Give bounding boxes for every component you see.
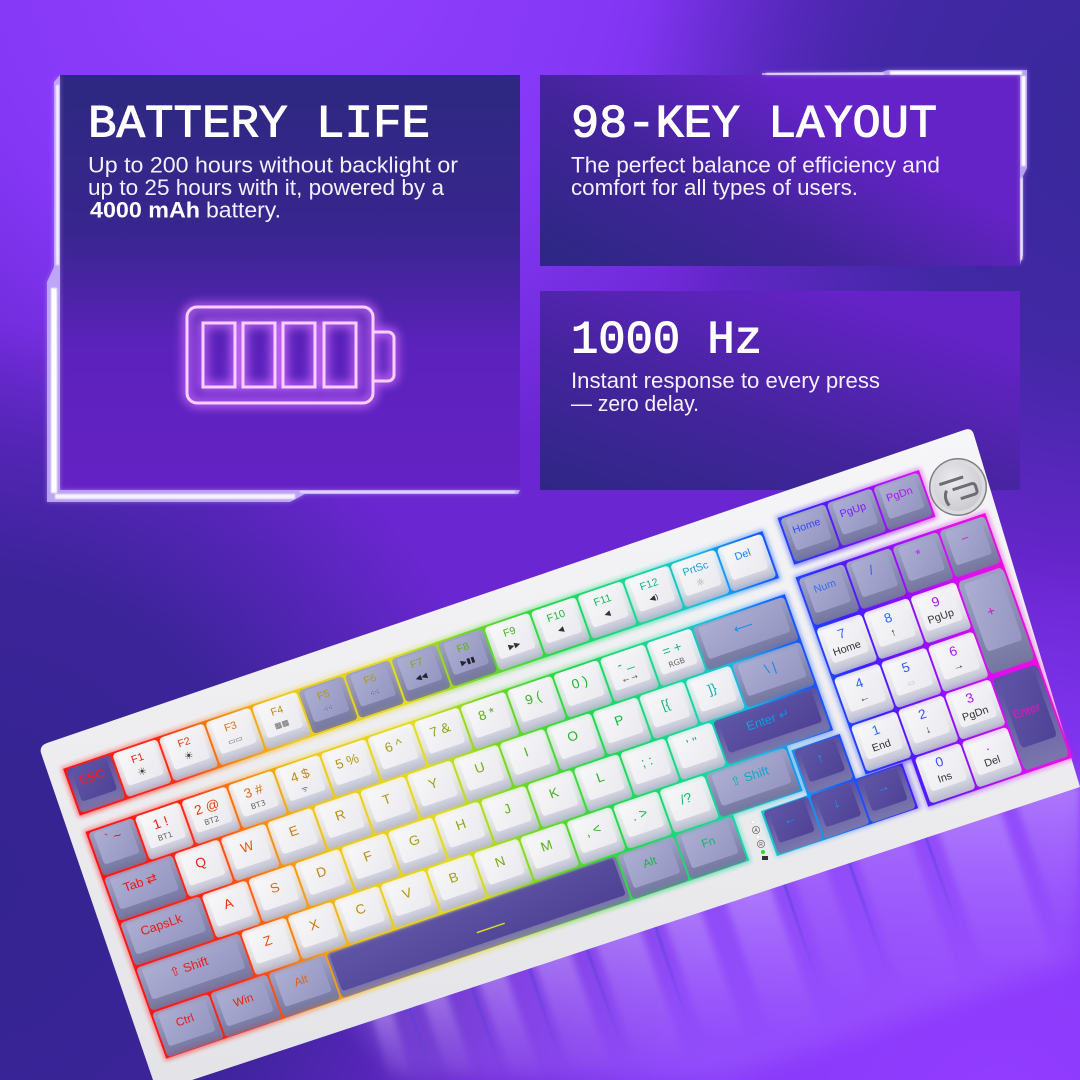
glass frame: layout panel (762, 70, 1027, 265)
text: response description: Instant response to every press (571, 368, 880, 393)
text: layout description: comfort for all types of users. (571, 175, 858, 200)
numpad: + (985, 603, 997, 619)
number key row: 4 $ (288, 765, 312, 785)
panel: 1000 Hz (540, 291, 1020, 490)
number key row: 2 @ (192, 796, 221, 818)
function key row: F8 (455, 640, 471, 656)
shift key row: C (353, 901, 368, 918)
caps key row: S (268, 879, 282, 896)
tab key row: O (565, 728, 580, 745)
tab key row: [{ (659, 696, 673, 713)
status indicators: R (759, 842, 763, 848)
number key row: 7 & (428, 720, 452, 740)
number key row: RGB (667, 656, 686, 670)
shift key row: N (493, 853, 507, 870)
caps key row: J (502, 801, 513, 817)
numpad: * (914, 546, 924, 562)
tab key row: Q (193, 854, 208, 871)
numpad: Ins (936, 770, 954, 786)
caps key row: ; : (639, 753, 655, 770)
function key row (66, 534, 777, 813)
arrow keys: → (874, 778, 892, 796)
caps key row: F (361, 848, 374, 865)
function key row: ☼ (695, 576, 707, 589)
function key row: PrtSc (681, 559, 711, 579)
tab key row: Y (426, 775, 440, 792)
number key row: - _ (615, 653, 635, 673)
shift key row: Z (261, 932, 274, 949)
heading: battery life: BATTERY LIFE (88, 98, 430, 150)
status indicators: A (754, 828, 758, 834)
number key row: = + (660, 639, 684, 659)
number key row: ← → (621, 672, 640, 685)
bottom key row: Alt (641, 854, 659, 871)
function key row: ▦▦ (273, 718, 290, 731)
function key row: ▭▭ (227, 733, 244, 747)
function key row: F10 (545, 608, 567, 625)
status indicators (751, 820, 768, 860)
numpad (798, 516, 1070, 820)
numpad: 3 (964, 690, 976, 706)
lighting backing: key gaps (61, 454, 1072, 1065)
bottom key row: Win (232, 991, 255, 1010)
function key row: F11 (592, 592, 613, 609)
arrow keys: ↓ (830, 795, 842, 811)
tab key row: R (333, 807, 348, 824)
caps key row: L (594, 769, 607, 785)
text: battery description: battery. (206, 198, 281, 222)
number key row (88, 597, 799, 876)
numpad: 5 (900, 659, 912, 676)
lighting bleed over keys (72, 485, 1069, 1057)
numpad: PgUp (926, 607, 956, 627)
function key row: ☀ (182, 748, 195, 763)
text: battery description (88, 152, 458, 222)
number key row: ` ~ (103, 827, 124, 846)
glass frame: battery panel (47, 75, 520, 502)
numpad: 7 (836, 626, 848, 642)
number key row: ⟵ (732, 616, 756, 637)
heading: 98-key layout: 98-KEY LAYOUT (571, 98, 937, 150)
function key row: F7 (409, 656, 425, 671)
function key row: ◀◀ (414, 671, 429, 683)
bottom key row: Alt (292, 972, 310, 989)
numpad: 2 (916, 706, 929, 722)
function key row: F1 (130, 751, 146, 766)
numpad: . (983, 738, 991, 753)
function key row: ☀ (136, 764, 149, 779)
arrow keys (747, 720, 916, 855)
keyboard plate (41, 429, 1080, 1080)
tab key row: P (612, 712, 626, 729)
arrow keys: ← (781, 810, 799, 828)
panel: battery life (47, 75, 520, 502)
knob (929, 458, 987, 516)
tab key row: W (239, 838, 256, 856)
navigation keys (780, 472, 933, 562)
numpad: Home (831, 638, 863, 659)
text: response description (571, 368, 880, 416)
numpad: ↓ (923, 724, 933, 736)
text: battery description: Up to 200 hours without backlight or (88, 152, 458, 178)
numpad: / (867, 563, 876, 578)
number key row: 8 * (476, 704, 498, 724)
navigation keys: PgUp (838, 500, 868, 520)
shift key row (136, 747, 801, 1011)
tab key row: ]} (706, 680, 719, 697)
caps key row: G (407, 832, 422, 849)
text: layout description: The perfect balance of efficiency and (571, 152, 940, 178)
spacebar (326, 856, 631, 998)
function key row: F4 (269, 704, 285, 719)
number key row: BT2 (203, 814, 221, 827)
function key row: ESC (77, 766, 107, 788)
tab key row: I (522, 744, 530, 760)
function key row: F6 (362, 672, 378, 687)
numpad: Num (812, 577, 838, 596)
motion streaks under keyboard (340, 770, 1080, 1080)
number key row: 1 ! (151, 813, 170, 832)
numpad: − (959, 530, 971, 547)
heading: 1000 Hz: 1000 Hz (571, 314, 762, 366)
bottom key row: Fn (700, 834, 717, 851)
caps key row: K (547, 785, 561, 802)
function key row: F3 (223, 719, 239, 735)
text: layout description (571, 152, 940, 200)
tab key row: U (473, 759, 487, 776)
function key row: ⁖⁖ (369, 687, 381, 698)
lighting glow on plate (58, 452, 1075, 1067)
shift key row: ⇧ Shift (728, 763, 771, 789)
shift key row: . > (630, 805, 650, 824)
number key row: BT1 (157, 830, 174, 843)
icon: neon battery (187, 307, 394, 403)
number key row: 0 ) (570, 673, 590, 692)
function key row: ⁖⁖ (322, 703, 334, 714)
numpad: 8 (882, 610, 894, 626)
function key row: Del (733, 547, 752, 563)
function key row: ◀) (648, 592, 660, 603)
numpad: ▭ (906, 677, 916, 688)
tab key row: T (380, 791, 393, 808)
number key row: 3 # (242, 781, 265, 801)
arrow keys: ↑ (814, 750, 826, 766)
caps key row: Enter ↵ (745, 706, 792, 734)
text: battery description: 4000 mAh (90, 198, 200, 222)
shift key row: /? (678, 790, 694, 807)
tab key row: E (287, 823, 301, 839)
caps key row (120, 687, 831, 966)
numpad: PgDn (961, 704, 990, 724)
keyboard (58, 452, 1075, 1067)
navigation keys: PgDn (885, 485, 914, 505)
caps key row: D (314, 863, 329, 881)
bottom key row: Ctrl (174, 1011, 196, 1029)
function key row: F2 (176, 735, 192, 750)
numpad: 4 (853, 675, 866, 691)
function key row: ◀ (556, 624, 565, 635)
numpad: Enter (1011, 701, 1042, 722)
number key row: ᯤ (300, 784, 310, 794)
caps key row: H (454, 816, 468, 833)
bottom key row (152, 816, 747, 1058)
function key row: F12 (638, 576, 660, 593)
navigation keys: Home (791, 516, 822, 536)
numpad: End (870, 737, 893, 755)
number key row: 6 ^ (383, 736, 405, 755)
tab key row: Tab ⇄ (121, 870, 159, 895)
text: battery description: up to 25 hours with it, powered by a (88, 175, 445, 200)
function key row: ▶▶ (507, 639, 522, 651)
function key row: F9 (502, 625, 518, 640)
shift key row: ⇧ Shift (168, 954, 210, 980)
shift key row: M (539, 837, 554, 855)
number key row: BT3 (250, 798, 267, 811)
number key row: 9 ( (523, 689, 544, 708)
text: response description: — zero delay. (571, 391, 699, 416)
icon: knob logo (939, 474, 979, 507)
numpad: 0 (933, 754, 945, 770)
caps key row: CapsLk (139, 911, 185, 938)
caps key row: A (221, 895, 236, 912)
tab key row: \ | (763, 659, 778, 677)
shift key row: X (307, 917, 321, 933)
numpad: Del (983, 753, 1002, 770)
function key row: ◀ (603, 608, 612, 619)
numpad: ← (857, 691, 872, 705)
numpad: → (951, 659, 966, 674)
numpad: 9 (929, 594, 942, 610)
tab key row (104, 642, 815, 921)
caps key row: ' " (685, 734, 700, 752)
shift key row: V (400, 885, 414, 902)
panel: 98-key layout (540, 70, 1027, 266)
function key row: ▶▮▮ (459, 654, 476, 668)
numpad: 6 (947, 643, 959, 660)
function key row: F5 (316, 688, 332, 703)
numpad: ↑ (889, 626, 898, 639)
shift key row: , < (583, 821, 603, 840)
shift key row: B (447, 869, 460, 886)
number key row: 5 % (333, 751, 361, 772)
numpad: 1 (870, 722, 882, 738)
